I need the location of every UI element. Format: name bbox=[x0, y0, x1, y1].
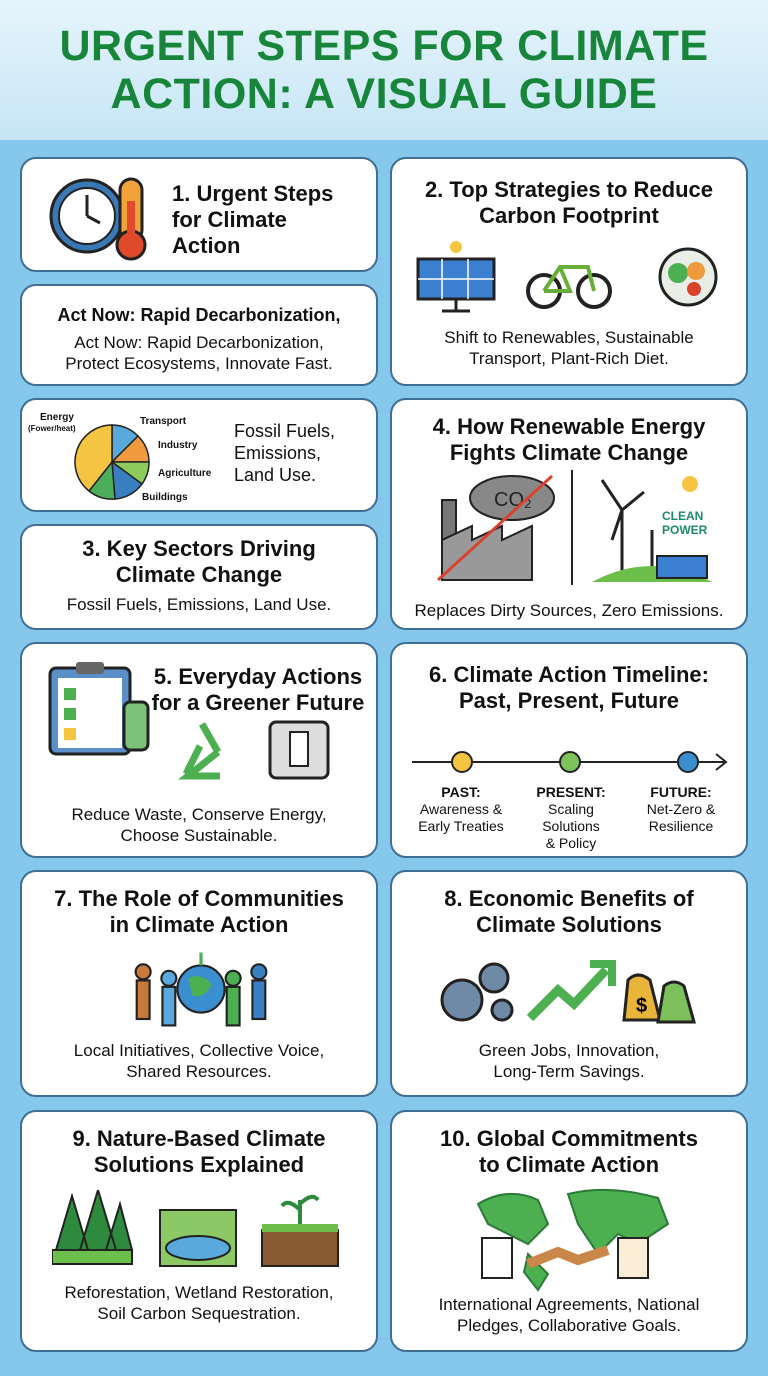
heading 3: 3. Key Sectors Driving bbox=[82, 536, 316, 561]
heading 10: 10. Global Commitments bbox=[440, 1126, 698, 1151]
heading 4: 4. How Renewable Energy bbox=[433, 414, 705, 439]
icon: clipboard bottle bbox=[48, 662, 150, 756]
panel: 8 economic bbox=[390, 870, 748, 1097]
text 5: Reduce Waste, Conserve Energy, bbox=[71, 805, 327, 824]
heading 2: 2. Top Strategies to Reduce bbox=[425, 177, 713, 202]
text 7: Local Initiatives, Collective Voice, bbox=[74, 1041, 324, 1060]
text pie: Land Use. bbox=[234, 465, 316, 485]
heading 9: Solutions Explained bbox=[94, 1152, 304, 1177]
panel: 6 timeline bbox=[390, 642, 748, 858]
chart: timeline bbox=[412, 751, 728, 773]
heading 5 bbox=[152, 664, 364, 715]
heading 5: 5. Everyday Actions bbox=[154, 664, 362, 689]
icon: recycle and switch bbox=[178, 720, 330, 780]
text 9: Reforestation, Wetland Restoration, bbox=[64, 1283, 334, 1302]
text pie: Emissions, bbox=[234, 443, 321, 463]
panel: 10 global bbox=[390, 1110, 748, 1352]
heading 10: to Climate Action bbox=[479, 1152, 659, 1177]
text 8: Long-Term Savings. bbox=[493, 1062, 645, 1081]
panel: pie chart bbox=[20, 398, 378, 512]
text 8 bbox=[479, 1041, 659, 1081]
heading 6: 6. Climate Action Timeline: bbox=[429, 662, 709, 687]
icon: factory vs clean power: POWER bbox=[662, 523, 708, 537]
text timeline labels: & Policy bbox=[546, 835, 596, 851]
heading 1: 1. Urgent Steps for Climate Action bbox=[172, 181, 333, 258]
text pie: Fossil Fuels, bbox=[234, 421, 335, 441]
heading 2: Carbon Footprint bbox=[479, 203, 659, 228]
heading 2 bbox=[425, 177, 713, 228]
text timeline labels: Awareness & bbox=[420, 801, 502, 817]
heading 8: Climate Solutions bbox=[476, 912, 662, 937]
heading 9 bbox=[72, 1126, 326, 1177]
text 2: Shift to Renewables, Sustainable bbox=[444, 328, 694, 347]
heading 7: 7. The Role of Communities bbox=[54, 886, 344, 911]
panel: 5 everyday actions bbox=[20, 642, 378, 858]
heading act now: Act Now: Rapid Decarbonization, bbox=[57, 305, 341, 325]
chart: sectors pie: Buildings bbox=[142, 492, 188, 503]
heading 3: Climate Change bbox=[116, 562, 282, 587]
text timeline labels bbox=[418, 784, 715, 851]
text 7 bbox=[74, 1041, 324, 1081]
panel: act now bbox=[20, 284, 378, 386]
heading 4: Fights Climate Change bbox=[450, 440, 688, 465]
text 9: Soil Carbon Sequestration. bbox=[97, 1304, 301, 1323]
panel: 9 nature-based bbox=[20, 1110, 378, 1352]
text timeline labels: Scaling bbox=[548, 801, 594, 817]
icon: people around globe bbox=[134, 952, 268, 1026]
text 2: Transport, Plant-Rich Diet. bbox=[469, 349, 669, 368]
heading 9: 9. Nature-Based Climate bbox=[72, 1126, 326, 1151]
title: ACTION: A VISUAL GUIDE bbox=[111, 70, 657, 118]
text 3: Fossil Fuels, Emissions, Land Use. bbox=[67, 595, 331, 614]
text 10: International Agreements, National bbox=[439, 1295, 699, 1314]
text 10 bbox=[439, 1295, 699, 1335]
icon: forest wetland soil bbox=[52, 1190, 339, 1267]
text timeline labels: FUTURE: bbox=[650, 784, 712, 800]
chart: sectors pie: (Fower/heat) bbox=[28, 424, 76, 433]
heading 6: Past, Present, Future bbox=[459, 688, 679, 713]
panel: 2 strategies bbox=[390, 157, 748, 386]
text timeline labels: Resilience bbox=[649, 818, 713, 834]
text 5 bbox=[71, 805, 327, 845]
chart: sectors pie: Agriculture bbox=[158, 468, 212, 479]
chart: sectors pie: Transport bbox=[140, 416, 187, 427]
icons: solar bike diet bbox=[416, 241, 718, 312]
panel: 3 key sectors bbox=[20, 524, 378, 630]
icon: clock and thermometer bbox=[50, 178, 146, 260]
icon: factory vs clean power bbox=[437, 470, 712, 585]
title bbox=[59, 22, 709, 118]
heading 8 bbox=[444, 886, 694, 937]
title: URGENT STEPS FOR CLIMATE bbox=[59, 22, 709, 70]
heading 8: 8. Economic Benefits of bbox=[444, 886, 694, 911]
text 5: Choose Sustainable. bbox=[121, 826, 277, 845]
heading 7: in Climate Action bbox=[110, 912, 288, 937]
panel: 1 urgent steps bbox=[20, 157, 378, 272]
panel: 7 communities bbox=[20, 870, 378, 1097]
text 2 bbox=[444, 328, 694, 368]
text 7: Shared Resources. bbox=[126, 1062, 272, 1081]
icon: world map handshake bbox=[476, 1188, 670, 1292]
chart: sectors pie: Industry bbox=[158, 440, 198, 451]
text 4: Replaces Dirty Sources, Zero Emissions. bbox=[415, 601, 723, 620]
icon: factory vs clean power: CLEAN bbox=[662, 509, 703, 523]
panel: 4 renewable bbox=[390, 398, 748, 630]
chart: sectors pie: Energy bbox=[40, 412, 74, 423]
heading 3 bbox=[82, 536, 316, 587]
heading 7 bbox=[54, 886, 344, 937]
heading 4 bbox=[432, 414, 706, 465]
icon: gears arrow money bbox=[440, 960, 696, 1024]
heading 10 bbox=[440, 1126, 698, 1177]
text timeline labels: Net-Zero & bbox=[647, 801, 715, 817]
text pie bbox=[234, 421, 335, 485]
text 10: Pledges, Collaborative Goals. bbox=[457, 1316, 681, 1335]
heading 5: for a Greener Future bbox=[152, 690, 364, 715]
text timeline labels: Early Treaties bbox=[418, 818, 504, 834]
chart: sectors pie bbox=[28, 412, 212, 503]
text act now bbox=[65, 333, 333, 373]
text 8: Green Jobs, Innovation, bbox=[479, 1041, 659, 1060]
icon: factory vs clean power: CO₂ bbox=[494, 489, 532, 511]
text 9 bbox=[64, 1283, 334, 1323]
text timeline labels: Solutions bbox=[542, 818, 600, 834]
text act now: Protect Ecosystems, Innovate Fast. bbox=[65, 354, 333, 373]
text timeline labels: PRESENT: bbox=[536, 784, 606, 800]
icon: gears arrow money: $ bbox=[636, 995, 647, 1017]
text act now: Act Now: Rapid Decarbonization, bbox=[74, 333, 324, 352]
heading 6 bbox=[429, 662, 709, 713]
text timeline labels: PAST: bbox=[441, 784, 481, 800]
